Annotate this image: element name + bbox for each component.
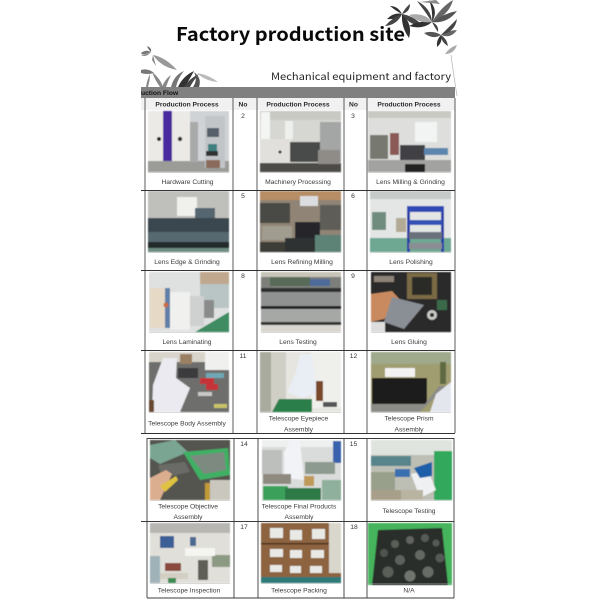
photo: lens edge and grinding <box>148 191 229 252</box>
process captions: Machinery Processing <box>265 179 331 186</box>
process captions: Telescope Testing <box>382 508 436 515</box>
table header row <box>141 98 455 110</box>
photo: lens milling and grinding <box>368 111 451 172</box>
process captions: Telescope Final Products <box>262 504 337 510</box>
photo: lens gluing <box>371 272 451 332</box>
photo: machinery processing <box>260 111 341 172</box>
process captions: Assembly <box>394 426 424 434</box>
decoration: bamboo bottom left <box>141 46 218 87</box>
process captions: Hardware Cutting <box>161 179 214 186</box>
process captions: Lens Refining Milling <box>271 259 333 266</box>
process captions: Assembly <box>174 514 203 521</box>
step numbers: 6 <box>351 193 355 200</box>
process captions: Lens Testing <box>279 339 317 346</box>
process captions: Lens Edge & Grinding <box>154 259 220 266</box>
step numbers: 18 <box>350 524 358 531</box>
process captions: Lens Milling & Grinding <box>376 179 445 186</box>
table header row: Production Process <box>266 102 330 108</box>
step numbers: 11 <box>240 353 247 360</box>
step numbers: 12 <box>350 353 357 360</box>
step numbers <box>240 113 358 531</box>
decoration: bamboo top right <box>385 0 457 96</box>
table header row: Production Process <box>377 102 441 108</box>
photo: finished products in green crate <box>368 523 452 585</box>
process captions: Lens Polishing <box>389 259 433 266</box>
step numbers: 14 <box>240 441 248 448</box>
process captions: Assembly <box>284 514 314 521</box>
photo: hardware cutting <box>148 111 229 172</box>
photo: telescope body assembly <box>149 352 229 412</box>
photo: telescope final products assembly <box>262 440 341 500</box>
photo: telescope testing <box>371 440 452 500</box>
process captions: N/A <box>403 588 415 594</box>
step numbers: 8 <box>241 273 245 280</box>
process captions: Telescope Prism <box>384 416 434 422</box>
photo: telescope eyepiece assembly <box>260 352 341 412</box>
process captions: Assembly <box>284 426 314 434</box>
photo: telescope inspection <box>150 523 230 583</box>
table grid: upper table <box>141 98 455 434</box>
step numbers: 2 <box>241 113 245 120</box>
process captions: Telescope Eyepiece <box>269 416 329 422</box>
step numbers: 17 <box>240 524 248 531</box>
process captions: Lens Gluing <box>391 339 427 346</box>
photo: lens refining milling <box>260 191 341 252</box>
table grid: lower table <box>141 438 454 598</box>
step numbers: 5 <box>241 193 245 200</box>
photo: lens laminating <box>149 272 229 332</box>
photo: telescope packing <box>261 523 341 583</box>
step numbers: 3 <box>351 113 355 120</box>
subtitle: Mechanical equipment and factory <box>271 68 452 83</box>
step numbers: 9 <box>351 273 355 280</box>
process captions: Telescope Body Assembly <box>148 420 226 428</box>
section bar: production flow <box>141 87 455 98</box>
table header row: No <box>239 102 247 108</box>
photo: telescope objective assembly <box>150 440 230 500</box>
photo: lens polishing <box>370 191 451 252</box>
section bar: production flow: uction Flow <box>141 90 179 97</box>
photo: telescope prism assembly <box>371 352 451 412</box>
step numbers: 15 <box>350 441 357 448</box>
process captions: Telescope Objective <box>158 504 218 510</box>
photo: lens testing <box>261 272 341 332</box>
title: Factory production site <box>176 20 405 47</box>
table header row: Production Process <box>155 102 219 108</box>
process captions: Telescope Packing <box>271 588 327 594</box>
process captions: Lens Laminating <box>162 339 212 346</box>
process captions: Telescope Inspection <box>158 588 221 594</box>
process captions <box>148 179 445 594</box>
table header row: No <box>349 102 358 108</box>
